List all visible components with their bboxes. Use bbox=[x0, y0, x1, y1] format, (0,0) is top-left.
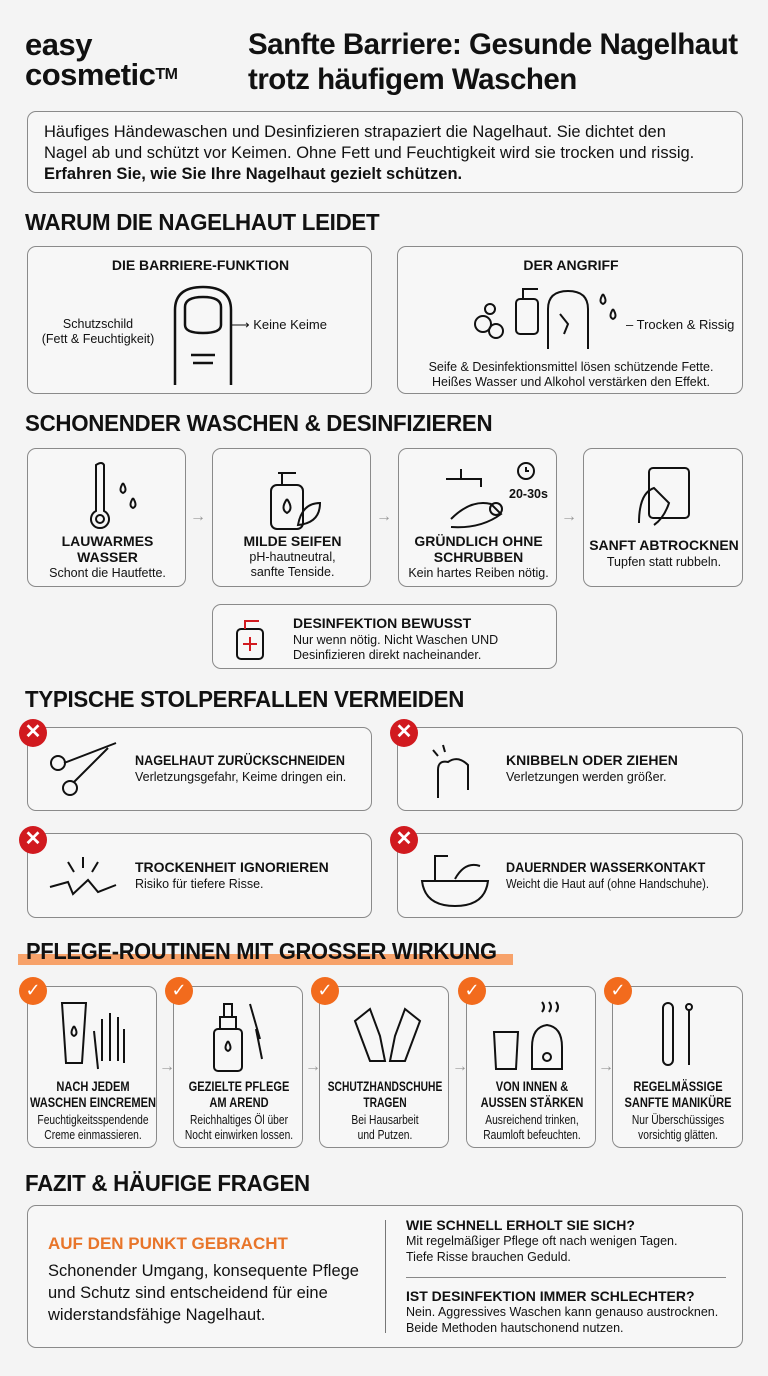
pitfall: trockenheit: TROCKENHEIT IGNORIEREN bbox=[135, 859, 329, 875]
pitfall: wasserkontakt: Weicht die Haut auf (ohne Handschuhe). bbox=[506, 877, 709, 891]
faq: IST DESINFEKTION IMMER SCHLECHTER? bbox=[406, 1288, 695, 1304]
intro box: Nagel ab und schützt vor Keimen. Ohne Fett und Feuchtigkeit wird sie trocken und rissig. bbox=[44, 144, 694, 162]
pitfall: knibbeln: KNIBBELN ODER ZIEHEN bbox=[506, 752, 678, 768]
intro box: Erfahren Sie, wie Sie Ihre Nagelhaut gezielt schützen. bbox=[44, 165, 462, 183]
heading: fazit: FAZIT & HÄUFIGE FRAGEN bbox=[25, 1170, 310, 1196]
icon: finger bbox=[174, 286, 232, 385]
text: → bbox=[561, 508, 577, 525]
title: trotz häufigem Waschen bbox=[248, 63, 577, 96]
faq bbox=[406, 1217, 726, 1335]
card: desinfektion: DESINFEKTION BEWUSST bbox=[293, 615, 471, 631]
text: → bbox=[305, 1058, 321, 1075]
card: abtrocknen bbox=[583, 448, 743, 587]
routine 1: Creme einmassieren. bbox=[44, 1128, 142, 1142]
faq: Beide Methoden hautschonend nutzen. bbox=[406, 1321, 624, 1335]
icon: soap and finger bbox=[474, 288, 616, 349]
pitfall: schneiden bbox=[27, 727, 372, 811]
panel: barriere: ⟶ Keine Keime bbox=[231, 317, 327, 332]
text: → bbox=[190, 508, 206, 525]
card: lauwarm: LAUWARMES bbox=[62, 533, 153, 549]
routine 1: Feuchtigkeitsspendende bbox=[37, 1113, 149, 1127]
logo: cosmeticTM bbox=[25, 57, 178, 92]
routine 2: Reichhaltiges Öl über bbox=[190, 1113, 288, 1127]
summary bbox=[48, 1234, 359, 1324]
intro box bbox=[27, 111, 743, 193]
routine 3: TRAGEN bbox=[363, 1095, 407, 1110]
pitfall: trockenheit bbox=[27, 833, 372, 918]
heading: warum: WARUM DIE NAGELHAUT LEIDET bbox=[25, 209, 379, 235]
text: ✓ bbox=[317, 980, 333, 1001]
routine 4: VON INNEN & bbox=[496, 1079, 568, 1094]
faq: WIE SCHNELL ERHOLT SIE SICH? bbox=[406, 1217, 635, 1233]
card: lauwarm: WASSER bbox=[77, 549, 138, 565]
routine 4: Ausreichend trinken, bbox=[485, 1113, 579, 1127]
title bbox=[248, 28, 738, 96]
panel: barriere: (Fett & Feuchtigkeit) bbox=[42, 332, 154, 346]
routine 3: und Putzen. bbox=[358, 1128, 412, 1142]
panel: angriff: Heißes Wasser und Alkohol verstärken den Effekt. bbox=[432, 375, 710, 389]
card: gründlich: GRÜNDLICH OHNE bbox=[414, 533, 543, 549]
panel: barriere: DIE BARRIERE-FUNKTION bbox=[112, 257, 289, 273]
routine 1 bbox=[27, 986, 157, 1148]
card: abtrocknen: SANFT ABTROCKNEN bbox=[589, 537, 739, 553]
pitfall: wasserkontakt bbox=[397, 833, 743, 918]
logo bbox=[25, 27, 178, 92]
pitfall: knibbeln: Verletzungen werden größer. bbox=[506, 770, 667, 784]
routine 2 bbox=[173, 986, 303, 1148]
card: seifen bbox=[212, 448, 371, 587]
routine 5 bbox=[612, 986, 743, 1148]
pitfall: knibbeln bbox=[397, 727, 743, 811]
text: ✕ bbox=[25, 828, 41, 850]
logo: easy bbox=[25, 27, 92, 62]
text: ✓ bbox=[25, 980, 41, 1001]
heading: waschen: SCHONENDER WASCHEN & DESINFIZIEREN bbox=[25, 410, 492, 436]
card: gründlich: 20-30s bbox=[509, 487, 548, 501]
intro box: Häufiges Händewaschen und Desinfizieren strapaziert die Nagelhaut. Sie dichtet den bbox=[44, 123, 666, 141]
text: ✕ bbox=[396, 721, 412, 743]
text: ✕ bbox=[25, 721, 41, 743]
routine 1: WASCHEN EINCREMEN bbox=[30, 1095, 156, 1110]
pitfall: schneiden: Verletzungsgefahr, Keime dringen ein. bbox=[135, 770, 346, 784]
routine 4: AUSSEN STÄRKEN bbox=[481, 1095, 583, 1110]
routine 3 bbox=[319, 986, 449, 1148]
heading: pflege with orange highlight: PFLEGE-ROUTINEN MIT GROSSER WIRKUNG bbox=[26, 938, 497, 964]
routine 2: AM AREND bbox=[209, 1095, 269, 1110]
card: desinfektion: Nur wenn nötig. Nicht Waschen UND bbox=[293, 633, 498, 647]
card: lauwarm: Schont die Hautfette. bbox=[49, 566, 166, 580]
panel: barriere: Schutzschild bbox=[63, 317, 133, 331]
routine 2: GEZIELTE PFLEGE bbox=[189, 1079, 289, 1094]
summary: Schonender Umgang, konsequente Pflege und Schutz sind entscheidend für eine widerstandsfähige Nagelhaut. bbox=[48, 1262, 359, 1324]
text: ✓ bbox=[464, 980, 480, 1001]
panel: angriff: DER ANGRIFF bbox=[523, 257, 619, 273]
faq: Tiefe Risse brauchen Geduld. bbox=[406, 1250, 571, 1264]
routine 3: Bei Hausarbeit bbox=[351, 1113, 419, 1127]
heading: stolperfallen: TYPISCHE STOLPERFALLEN VERMEIDEN bbox=[25, 686, 464, 712]
routine 3: SCHUTZHANDSCHUHE bbox=[328, 1079, 442, 1094]
panel: angriff: – Trocken & Rissig bbox=[626, 317, 734, 332]
routine 5: vorsichtig glätten. bbox=[638, 1128, 718, 1142]
routine 1: NACH JEDEM bbox=[56, 1079, 130, 1094]
card: gründlich bbox=[398, 448, 557, 587]
faq: Mit regelmäßiger Pflege oft nach wenigen Tagen. bbox=[406, 1234, 677, 1248]
routine 5: SANFTE MANIKÜRE bbox=[624, 1095, 732, 1110]
card: lauwarm bbox=[27, 448, 186, 587]
text: → bbox=[452, 1058, 468, 1075]
card: seifen: pH-hautneutral, bbox=[249, 550, 336, 564]
fazit box bbox=[27, 1205, 743, 1348]
routine 5: Nur Überschüssiges bbox=[632, 1113, 724, 1127]
title: Sanfte Barriere: Gesunde Nagelhaut bbox=[248, 28, 738, 61]
panel: angriff: Seife & Desinfektionsmittel lösen schützende Fette. bbox=[429, 360, 713, 374]
card: seifen: MILDE SEIFEN bbox=[243, 533, 342, 549]
card: gründlich: Kein hartes Reiben nötig. bbox=[408, 566, 549, 580]
card: seifen: sanfte Tenside. bbox=[251, 565, 334, 579]
text: ✓ bbox=[171, 980, 187, 1001]
panel: angriff bbox=[397, 246, 743, 394]
routine 5: REGELMÄSSIGE bbox=[633, 1079, 723, 1094]
panel: barriere bbox=[27, 246, 372, 394]
summary: AUF DEN PUNKT GEBRACHT bbox=[48, 1234, 288, 1253]
pitfall: trockenheit: Risiko für tiefere Risse. bbox=[135, 877, 264, 891]
card: gründlich: SCHRUBBEN bbox=[434, 549, 523, 565]
text: ✕ bbox=[396, 828, 412, 850]
text: ✓ bbox=[610, 980, 626, 1001]
text: → bbox=[159, 1058, 175, 1075]
text: → bbox=[376, 508, 392, 525]
routine 2: Nocht einwirken lossen. bbox=[185, 1128, 293, 1142]
card: abtrocknen: Tupfen statt rubbeln. bbox=[607, 555, 721, 569]
pitfall: wasserkontakt: DAUERNDER WASSERKONTAKT bbox=[506, 859, 705, 875]
faq: Nein. Aggressives Waschen kann genauso austrocknen. bbox=[406, 1305, 718, 1319]
routine 4 bbox=[466, 986, 596, 1148]
text: → bbox=[598, 1058, 614, 1075]
routine 4: Raumloft befeuchten. bbox=[483, 1128, 581, 1142]
pitfall: schneiden: NAGELHAUT ZURÜCKSCHNEIDEN bbox=[135, 752, 345, 768]
card: desinfektion: Desinfizieren direkt nacheinander. bbox=[293, 648, 481, 662]
card: desinfektion bbox=[212, 604, 557, 669]
